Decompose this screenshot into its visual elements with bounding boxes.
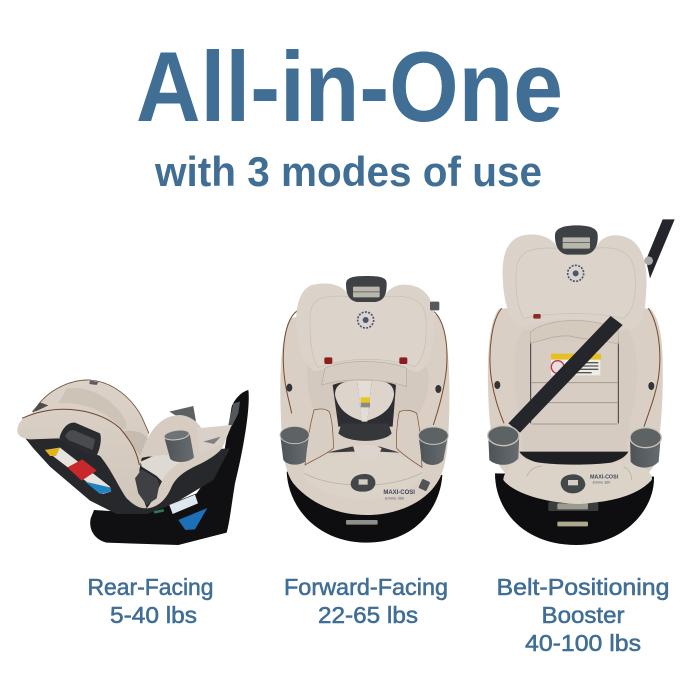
forward-facing car seat	[280, 276, 449, 543]
seat cushion	[503, 458, 652, 503]
base	[495, 473, 654, 545]
label: forward-facing	[284, 574, 448, 628]
brand mark: MAXI-COSI	[383, 490, 415, 496]
outer shell	[280, 310, 449, 515]
small clips	[430, 302, 439, 310]
label: belt-positioning booster: 40-100 lbs	[525, 630, 641, 656]
rear stand bracket	[228, 402, 240, 427]
outer shell	[488, 308, 663, 504]
harness dark surround	[333, 381, 396, 427]
far cup holder	[169, 406, 196, 422]
label: rear-facing: Rear-Facing	[88, 574, 214, 600]
seat cushion	[303, 453, 423, 500]
headrest handle	[555, 225, 598, 255]
arm bolsters	[305, 409, 333, 465]
label: rear-facing: 5-40 lbs	[110, 602, 197, 628]
forward-facing car seat: Emme 360	[385, 495, 405, 500]
shoulder belt	[508, 316, 623, 433]
base label	[169, 495, 198, 514]
blue wedge	[178, 508, 207, 530]
headrest	[296, 283, 435, 372]
headrest handle	[346, 276, 387, 302]
piping	[33, 380, 149, 433]
cup holders	[488, 433, 519, 465]
pale inner seat wall	[141, 452, 190, 483]
dark side gap	[135, 469, 159, 505]
top pad	[322, 362, 407, 387]
label: forward-facing: 22-65 lbs	[318, 602, 418, 628]
label: rear-facing	[88, 574, 214, 628]
label: belt-positioning booster: Booster	[542, 602, 625, 628]
rear-facing car seat	[17, 380, 249, 545]
belt-positioning booster seat: Emme 360	[593, 480, 610, 484]
warning label	[551, 354, 601, 360]
logo	[568, 265, 584, 281]
label: belt-positioning booster	[496, 574, 670, 656]
logo	[358, 312, 374, 328]
side holes	[286, 384, 292, 392]
base	[287, 472, 442, 543]
crotch buckle	[561, 474, 585, 493]
warning label strips	[45, 448, 111, 494]
headrest back contour	[32, 402, 48, 412]
upper belt and guide	[646, 219, 675, 278]
title: All-in-One	[136, 31, 563, 142]
label: forward-facing: Forward-Facing	[284, 574, 448, 600]
dark shell	[24, 433, 230, 514]
buckle	[338, 423, 392, 441]
near cup holder	[164, 431, 194, 462]
seat side and headrest shell	[17, 380, 149, 508]
cup holders	[280, 433, 309, 465]
headrest	[503, 234, 647, 329]
crotch buckle	[351, 474, 375, 492]
front cushion	[140, 415, 232, 509]
piping	[490, 308, 660, 427]
brand mark: MAXI-COSI	[590, 475, 619, 481]
piping	[283, 311, 447, 425]
leg rest pad	[197, 425, 232, 453]
handle opening	[59, 423, 101, 457]
harness red clips	[324, 357, 332, 364]
lap belt	[519, 452, 628, 467]
label: belt-positioning booster: Belt-Positioning	[496, 574, 670, 600]
belt-positioning booster seat	[488, 219, 675, 545]
lower harness straps	[327, 447, 400, 453]
inner back	[514, 330, 637, 450]
inner back shadow	[307, 360, 429, 417]
base and stand	[90, 390, 249, 545]
subtitle: with 3 modes of use	[154, 148, 542, 195]
chest pads	[335, 381, 362, 421]
